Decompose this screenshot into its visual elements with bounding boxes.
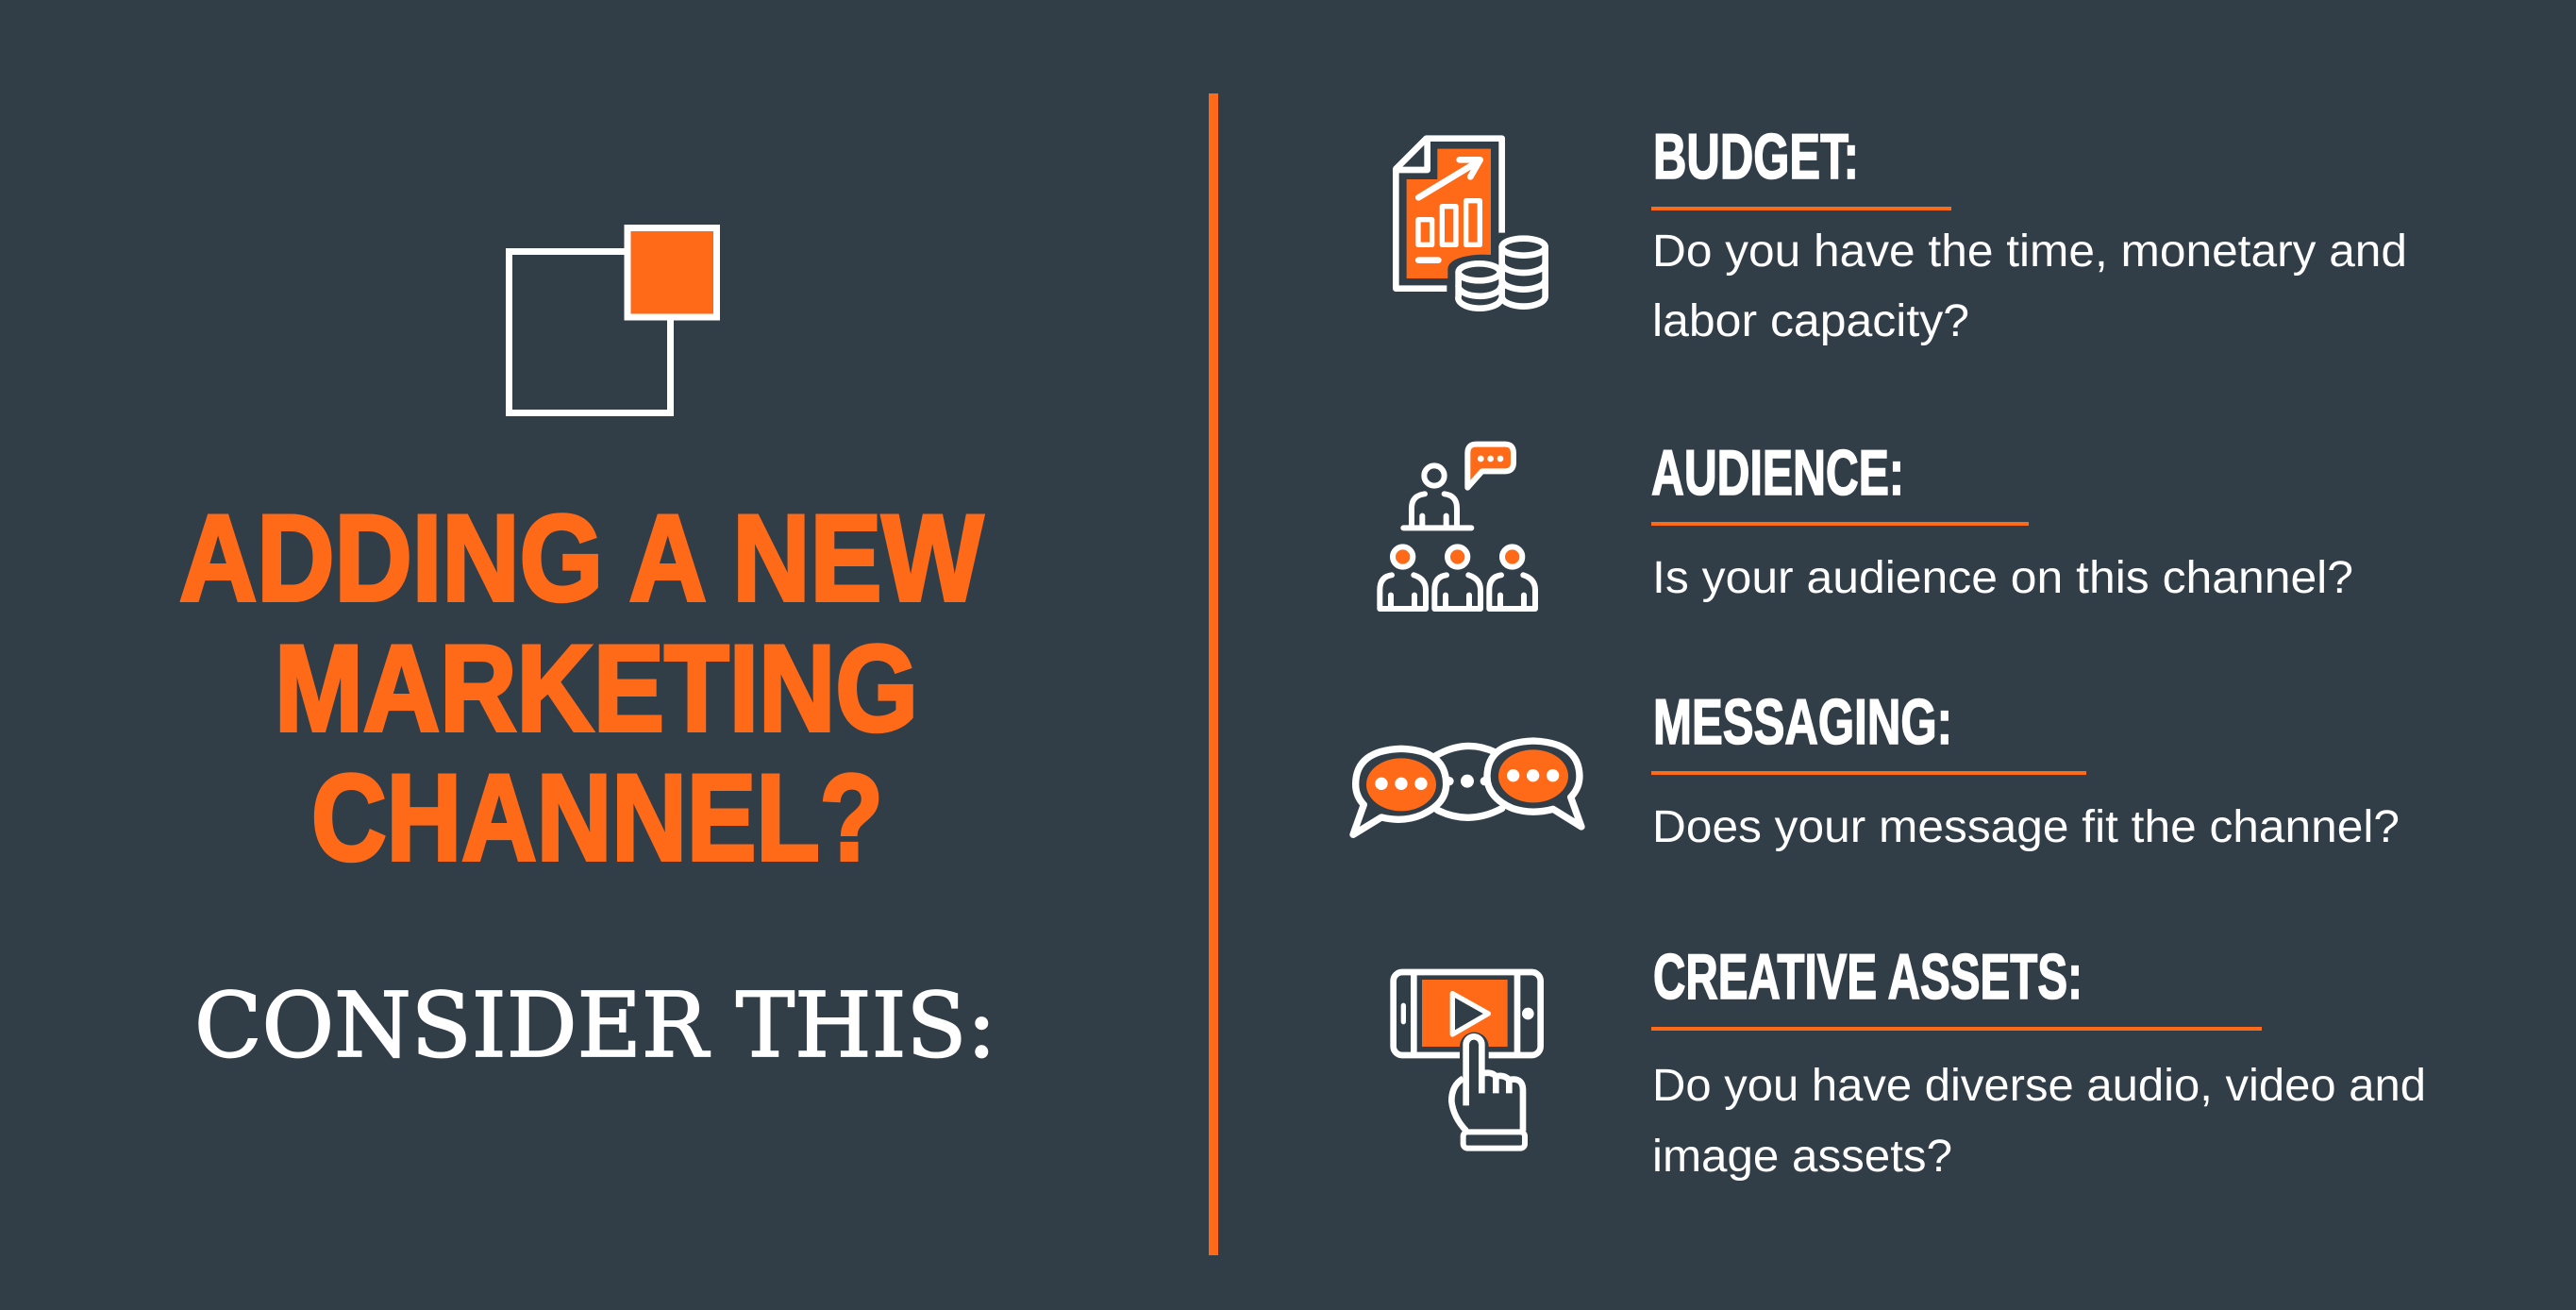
title: adding a new marketing channel: MARKETING: [275, 619, 918, 757]
icon: phone with video and pointing hand: [1394, 972, 1541, 1149]
divider line: [1209, 93, 1218, 1255]
text: budget question: labor capacity?: [1652, 296, 1969, 346]
text: messaging question: Does your message fit the channel?: [1652, 802, 2400, 852]
icon: speech bubbles: [1353, 741, 1581, 834]
underline: messaging: [1651, 771, 2086, 775]
panel: left title area: [179, 228, 996, 1078]
underline: creative assets: [1651, 1027, 2262, 1031]
heading: creative assets: CREATIVE ASSETS:: [1653, 941, 2083, 1013]
panel: creative assets: [1394, 941, 2426, 1182]
heading: messaging: MESSAGING:: [1653, 686, 1952, 758]
text: creative assets question: Do you have diverse audio, video and: [1652, 1061, 2426, 1111]
subtitle: consider this: CONSIDER THIS:: [194, 974, 996, 1078]
panel: messaging: [1353, 686, 2400, 852]
underline: audience: [1651, 522, 2029, 526]
panel: audience: [1380, 437, 2353, 609]
heading: audience: AUDIENCE:: [1651, 437, 1904, 509]
text: budget question: [1652, 227, 2407, 346]
title: adding a new marketing channel: [179, 489, 983, 886]
underline: budget: [1651, 207, 1951, 210]
text: budget question: Do you have the time, monetary and: [1652, 227, 2407, 277]
text: audience question: Is your audience on this channel?: [1652, 553, 2353, 603]
title: adding a new marketing channel: CHANNEL?: [311, 748, 883, 886]
text: creative assets question: image assets?: [1652, 1132, 1952, 1182]
icon: overlapping squares logo: [510, 228, 717, 413]
title: adding a new marketing channel: ADDING A NEW: [179, 489, 983, 627]
icon: document and coins: [1396, 139, 1546, 309]
panel: budget: [1396, 121, 2407, 346]
text: creative assets question: [1652, 1061, 2426, 1182]
heading: budget: BUDGET:: [1653, 121, 1859, 193]
icon: speaker and audience: [1380, 445, 1535, 609]
